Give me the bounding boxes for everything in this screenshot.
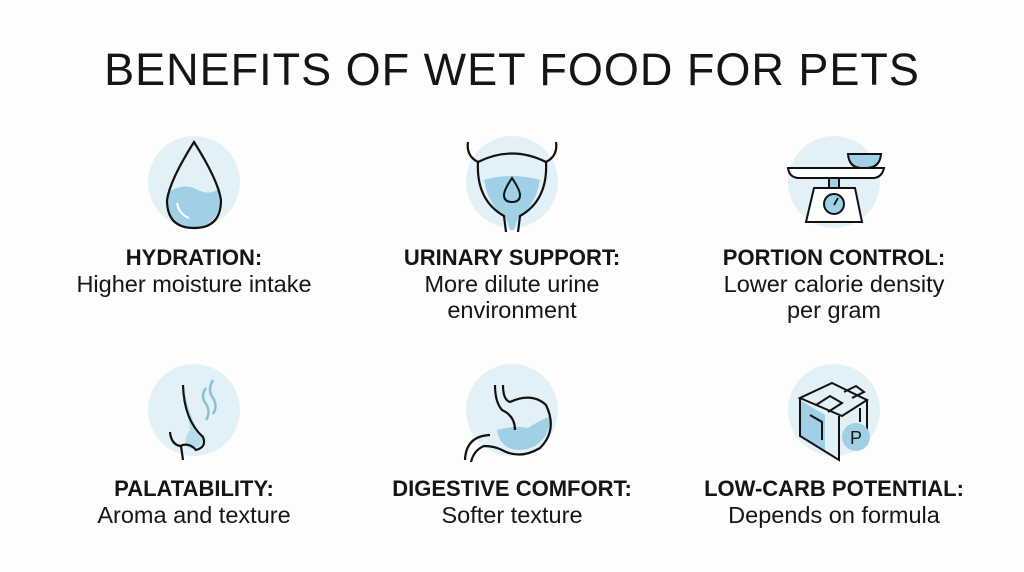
text: hydration: Higher moisture intake <box>76 271 312 297</box>
panel: digestive comfort <box>392 364 632 528</box>
panel: low-carb potential <box>704 364 964 528</box>
panel: portion control: per gram <box>787 297 881 323</box>
text: digestive comfort: Softer texture <box>441 502 583 528</box>
heading: digestive comfort: DIGESTIVE COMFORT: <box>392 476 632 501</box>
icon: water drop <box>148 136 240 228</box>
text: palatability: Aroma and texture <box>97 502 291 528</box>
heading: hydration: HYDRATION: <box>126 245 262 270</box>
panel: urinary support: environment <box>447 297 577 323</box>
panel: urinary support <box>404 136 620 323</box>
panel: palatability <box>97 364 291 528</box>
heading: low-carb potential: LOW-CARB POTENTIAL: <box>704 476 964 501</box>
icon: kitchen scale <box>788 136 884 228</box>
icon: stomach <box>465 364 558 462</box>
icon: nose with aroma <box>148 364 240 460</box>
panel: hydration <box>76 136 312 297</box>
panel: portion control <box>723 136 945 323</box>
icon: bladder <box>466 136 558 232</box>
icon: protein cube: P <box>850 428 862 448</box>
heading: portion control: PORTION CONTROL: <box>723 245 945 270</box>
text: low-carb potential: Depends on formula <box>728 502 941 528</box>
title: BENEFITS OF WET FOOD FOR PETS <box>104 44 920 95</box>
text: urinary support: More dilute urine <box>424 271 600 297</box>
icon: protein cube <box>788 364 880 460</box>
heading: palatability: PALATABILITY: <box>114 476 274 501</box>
text: portion control: Lower calorie density <box>724 271 945 297</box>
heading: urinary support: URINARY SUPPORT: <box>404 245 620 270</box>
